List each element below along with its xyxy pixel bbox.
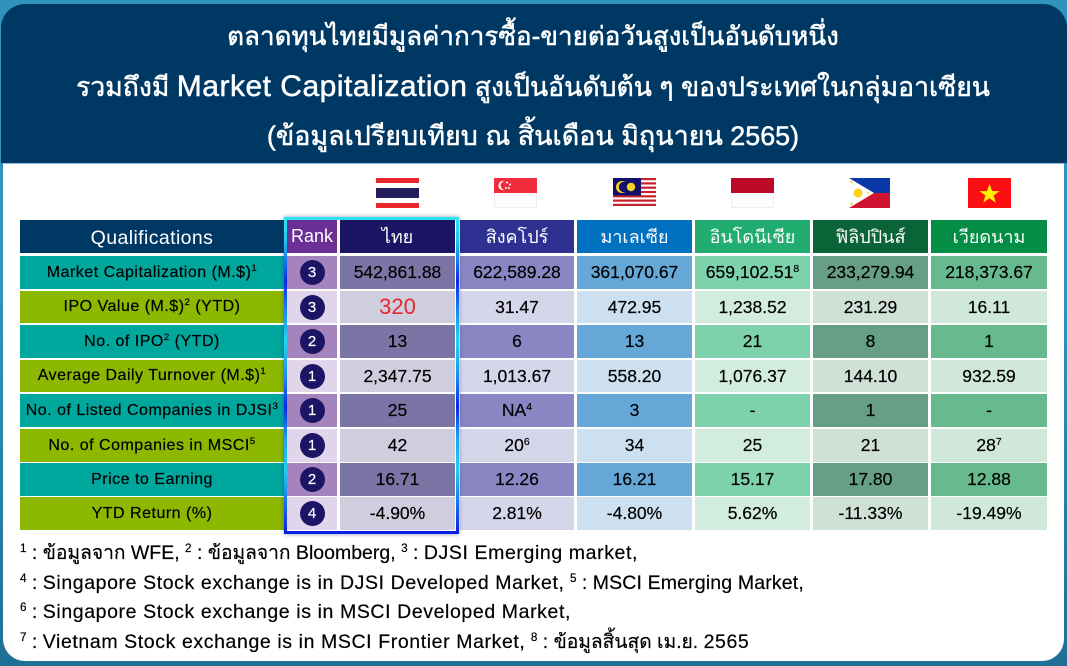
row: No. of IPO: 21 [743, 331, 762, 351]
row: No. of IPO: 13 [388, 331, 407, 351]
white content panel [3, 163, 1064, 661]
row: Companies in MSCI: 42 [388, 435, 407, 455]
row: YTD Return: -4.90% [370, 503, 425, 523]
flag: Singapore [494, 178, 537, 208]
row: Listed Companies in DJSI: NA4 [502, 400, 532, 420]
highlight frame around Thailand column [284, 217, 459, 534]
row: No. of IPO: No. of IPO2 (YTD) [84, 332, 220, 350]
row: Companies in MSCI [20, 429, 1047, 462]
row: Market Capitalization: 233,279.94 [827, 262, 914, 282]
row: Companies in MSCI: 34 [625, 435, 644, 455]
row: Market Capitalization: 622,589.28 [473, 262, 561, 282]
row: Average Daily Turnover: Average Daily Turnover (M.$)1 [38, 366, 266, 384]
row: IPO Value: 3 [308, 298, 316, 316]
row: YTD Return: YTD Return (%) [92, 504, 212, 522]
row: Average Daily Turnover: 558.20 [608, 366, 661, 386]
row: YTD Return: 4 [308, 505, 316, 522]
row: YTD Return: -4.80% [607, 503, 662, 523]
row: Listed Companies in DJSI: 1 [308, 402, 316, 419]
row: Listed Companies in DJSI: 1 [866, 400, 875, 420]
row: IPO Value: 16.11 [968, 296, 1010, 316]
flag: Indonesia [731, 178, 774, 208]
flag: Philippines [849, 178, 890, 208]
title line 2: รวมถึงมี Market Capitalization สูงเป็นอันดับต้น ๆ ของประเทศในกลุ่มอาเซียน [76, 70, 990, 103]
row: IPO Value: 472.95 [608, 296, 661, 316]
heading: Vietnam [931, 220, 1047, 253]
heading: Malaysia: มาเลเซีย [600, 227, 669, 247]
row: Companies in MSCI: 25 [743, 435, 762, 455]
row: Listed Companies in DJSI: 3 [630, 400, 639, 420]
heading: Rank: Rank [291, 226, 333, 246]
heading: Qualifications [20, 220, 284, 253]
heading: Rank [287, 220, 337, 253]
row: Price to Earning: 12.26 [495, 469, 539, 489]
row: IPO Value: IPO Value (M.$)2 (YTD) [64, 297, 240, 315]
row: No. of IPO [20, 325, 1047, 358]
row: Companies in MSCI: No. of Companies in MSCI5 [48, 436, 256, 454]
footnote line 1: 1 : ข้อมูลจาก WFE, 2 : ข้อมูลจาก Bloomberg, 3 : DJSI Emerging market, [20, 542, 638, 564]
row: YTD Return: 5.62% [728, 503, 777, 523]
row: Average Daily Turnover: 2,347.75 [363, 366, 432, 386]
row: Companies in MSCI: 21 [861, 435, 880, 455]
row: No. of IPO: 2 [308, 333, 316, 350]
row: Listed Companies in DJSI: 25 [388, 400, 407, 420]
row: Price to Earning: 17.80 [849, 469, 892, 489]
row: YTD Return: 2.81% [492, 503, 542, 523]
row: IPO Value: 1,238.52 [718, 296, 787, 316]
table header row [20, 220, 1047, 253]
row: IPO Value: 31.47 [495, 296, 539, 316]
row: Market Capitalization: 218,373.67 [945, 262, 1033, 282]
row: No. of IPO: 1 [984, 331, 994, 351]
row: YTD Return: -19.49% [956, 503, 1022, 523]
footnote line 3: 6 : Singapore Stock exchange is in MSCI Developed Market, [20, 601, 571, 623]
flag: Vietnam [968, 178, 1011, 208]
row: Price to Earning: 16.21 [613, 469, 656, 489]
row: Price to Earning: Price to Earning [91, 470, 213, 488]
row: No. of IPO: 6 [512, 331, 522, 351]
heading: Indonesia: อินโดนีเซีย [710, 227, 795, 247]
header band [1, 4, 1067, 163]
row: Price to Earning [20, 463, 1047, 496]
row: Companies in MSCI: 1 [308, 437, 316, 454]
heading: Qualifications: Qualifications [91, 226, 213, 248]
row: Market Capitalization [20, 256, 1047, 289]
heading: Indonesia [695, 220, 810, 253]
heading: Singapore: สิงคโปร์ [486, 227, 548, 247]
row: Listed Companies in DJSI: - [750, 400, 755, 420]
row: Average Daily Turnover: 1,076.37 [718, 366, 787, 386]
heading: Philippines: ฟิลิปปินส์ [836, 227, 905, 247]
row: Price to Earning: 15.17 [731, 469, 774, 489]
title line 3: (ข้อมูลเปรียบเทียบ ณ สิ้นเดือน มิถุนายน 2565) [267, 121, 799, 151]
heading: Thailand: ไทย [382, 227, 413, 247]
row: Average Daily Turnover: 932.59 [962, 366, 1016, 386]
row: Price to Earning: 12.88 [967, 469, 1011, 489]
row: Price to Earning: 2 [308, 471, 316, 488]
row: No. of IPO: 8 [866, 331, 875, 351]
footnote line 4: 7 : Vietnam Stock exchange is in MSCI Frontier Market, 8 : ข้อมูลสิ้นสุด เม.ย. 2565 [20, 631, 749, 653]
row: IPO Value: 231.29 [844, 296, 897, 316]
row: YTD Return [20, 497, 1047, 530]
row: Listed Companies in DJSI: No. of Listed Companies in DJSI3 [26, 401, 278, 418]
heading: Philippines [813, 220, 928, 253]
heading: Malaysia [577, 220, 692, 253]
row: Market Capitalization: Market Capitalization (M.$)1 [47, 263, 257, 280]
row: Average Daily Turnover: 1,013.67 [483, 366, 551, 386]
row: IPO Value [20, 291, 1047, 323]
heading: Thailand [340, 220, 455, 253]
row: Market Capitalization: 659,102.518 [706, 262, 799, 282]
row: Market Capitalization: 361,070.67 [591, 262, 678, 282]
row: Price to Earning: 16.71 [376, 469, 419, 489]
row: No. of IPO: 13 [625, 331, 644, 351]
row: Companies in MSCI: 206 [504, 435, 530, 455]
row: Market Capitalization: 3 [308, 264, 316, 281]
row: YTD Return: -11.33% [839, 503, 902, 523]
title line 1: ตลาดทุนไทยมีมูลค่าการซื้อ-ขายต่อวันสูงเป็นอันดับหนึ่ง [227, 21, 839, 51]
row: Average Daily Turnover: 144.10 [844, 366, 897, 386]
footnote line 2: 4 : Singapore Stock exchange is in DJSI Developed Market, 5 : MSCI Emerging Market, [20, 572, 804, 594]
flag: Malaysia [613, 178, 656, 206]
heading: Singapore [460, 220, 574, 253]
row: Companies in MSCI: 287 [976, 435, 1002, 455]
row: Average Daily Turnover: 1 [308, 368, 316, 384]
row: Listed Companies in DJSI: - [986, 400, 992, 420]
heading: Vietnam: เวียดนาม [953, 227, 1025, 247]
row: Listed Companies in DJSI [20, 394, 1047, 427]
flag: Thailand [376, 178, 419, 208]
row: IPO Value: 320 [379, 294, 416, 319]
row: Market Capitalization: 542,861.88 [354, 262, 441, 282]
row: Average Daily Turnover [20, 360, 1047, 392]
